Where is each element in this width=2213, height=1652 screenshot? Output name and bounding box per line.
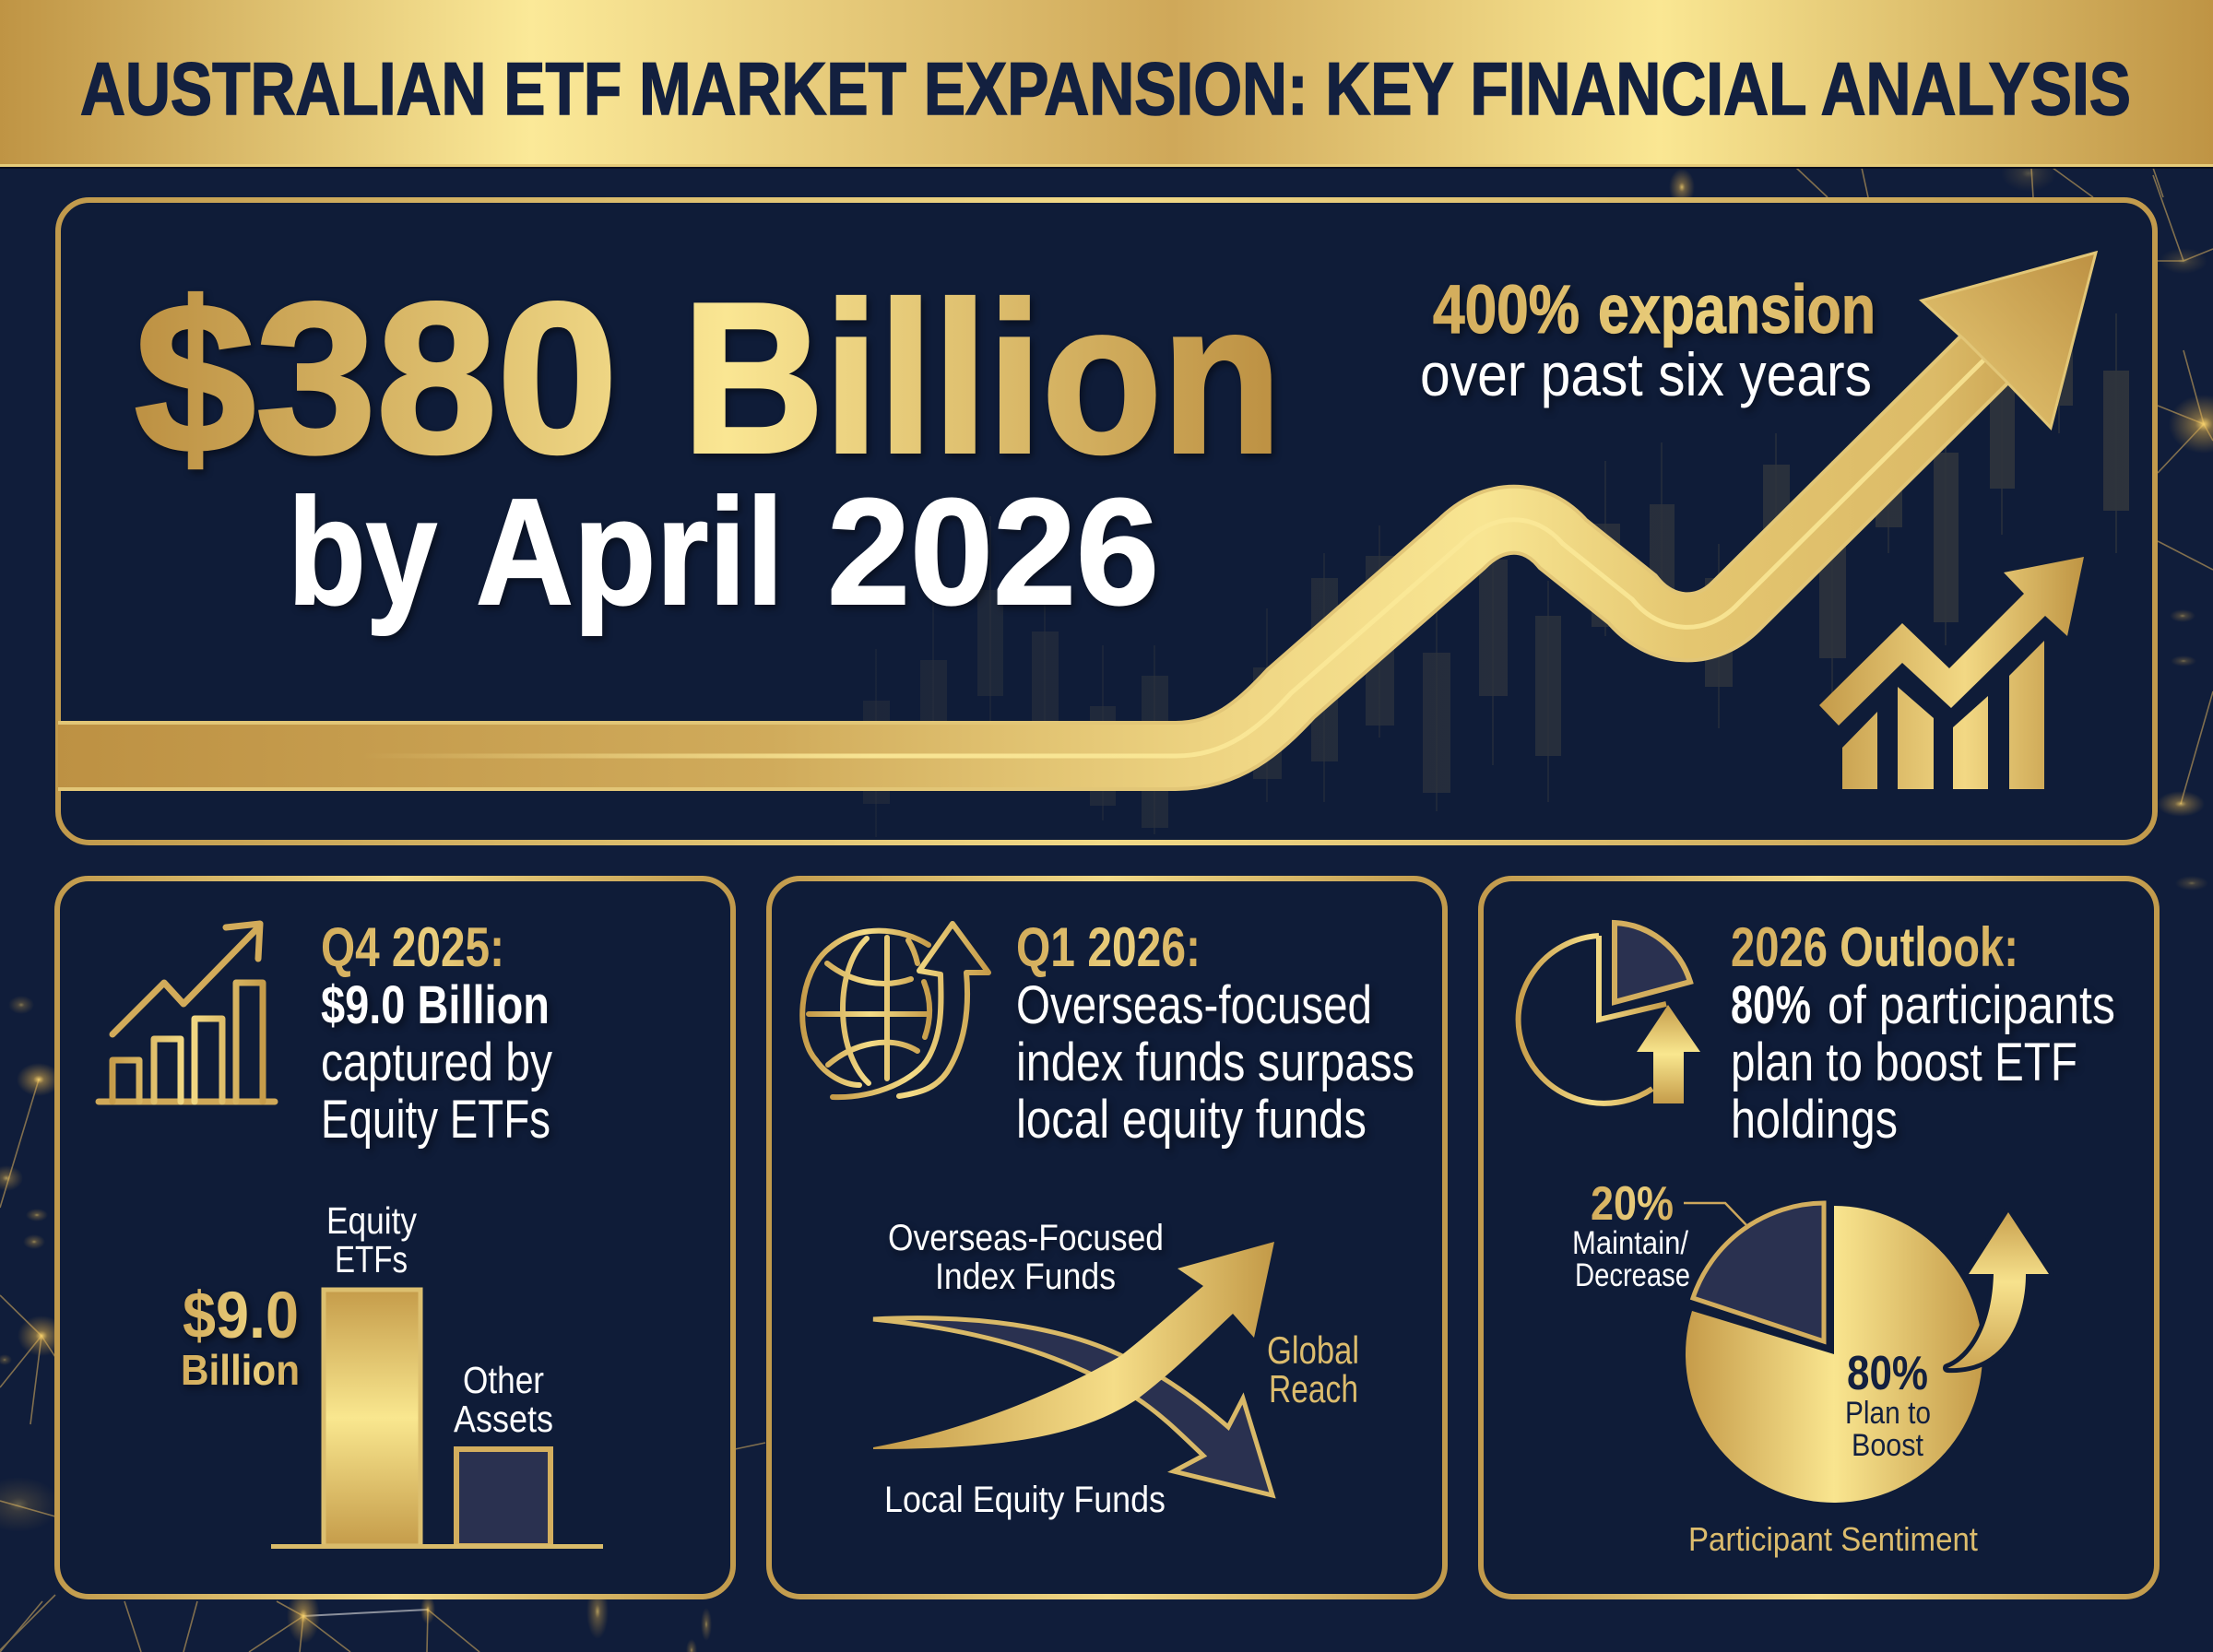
- chart caption: Participant Sentiment: [1688, 1520, 1978, 1558]
- label: 80% plan to boost: Plan to: [1845, 1396, 1931, 1431]
- label: equity ETFs: Equity: [326, 1199, 417, 1242]
- icon: bar chart with arrow: [99, 924, 275, 1102]
- heading and description: of participants: [1828, 975, 2115, 1035]
- label: overseas-focused index funds: [888, 1218, 1164, 1297]
- arrow: overseas funds rising: [873, 1242, 1274, 1449]
- value label: [181, 1280, 300, 1394]
- leader line: [1684, 1203, 1747, 1226]
- icon: bars with rising arrow: [1819, 557, 2084, 789]
- label: 20% maintain or decrease: Maintain/: [1572, 1225, 1688, 1261]
- heading and description: [321, 916, 552, 1150]
- label: overseas-focused index funds: Overseas-Focused: [888, 1218, 1164, 1258]
- expansion callout: over past six years: [1420, 340, 1872, 408]
- label: other assets: Assets: [454, 1398, 553, 1440]
- heading and description: Q4 2025:: [321, 916, 504, 978]
- panel: Q4 2025 equity ETFs: [57, 879, 733, 1597]
- pie slice: 20% maintain or decrease: [1693, 1203, 1824, 1341]
- heading and description: [1016, 916, 1414, 1150]
- label: local equity funds: Local Equity Funds: [884, 1480, 1166, 1520]
- label: other assets: [454, 1359, 553, 1440]
- expansion callout: 400%: [1433, 271, 1580, 348]
- expansion callout: expansion: [1598, 271, 1876, 348]
- headline date: [288, 467, 1159, 636]
- headline date: April: [476, 467, 784, 636]
- icon: pie chart with arrow: [1519, 923, 1700, 1103]
- value label: $9.0: [183, 1280, 299, 1352]
- icon: globe with arrow: [802, 924, 988, 1097]
- heading and description: 80%: [1731, 975, 1811, 1035]
- heading and description: Q1 2026:: [1016, 916, 1201, 978]
- label: overseas-focused index funds: Index Funds: [935, 1257, 1116, 1297]
- expansion callout: [1420, 271, 1876, 408]
- panel: 2026 outlook: [1481, 879, 2157, 1597]
- label: global reach: Global: [1267, 1328, 1359, 1372]
- heading and description: plan to boost ETF: [1731, 1032, 2077, 1092]
- heading and description: local equity funds: [1016, 1090, 1367, 1150]
- pie chart: participant sentiment: [1572, 1177, 2049, 1558]
- title banner: [0, 0, 2213, 169]
- headline date: by: [288, 467, 437, 636]
- headline value: Billion: [682, 259, 1282, 498]
- headline value: [135, 259, 1282, 498]
- heading and description: $9.0 Billion: [321, 975, 550, 1035]
- main growth arrow: [58, 253, 2096, 756]
- heading and description: [1731, 916, 2115, 1150]
- heading and description: 2026 Outlook:: [1731, 916, 2018, 978]
- panel: headline growth: [58, 200, 2155, 843]
- candlestick chart backdrop: [863, 304, 2129, 837]
- headline value: $380: [135, 259, 618, 498]
- heading and description: index funds surpass: [1016, 1032, 1414, 1092]
- label: 80% plan to boost: [1845, 1347, 1931, 1463]
- label: equity ETFs: ETFs: [335, 1238, 408, 1280]
- heading and description: Overseas-focused: [1016, 975, 1372, 1035]
- panel: Q1 2026 overseas funds: [769, 879, 1445, 1597]
- label: equity ETFs: [326, 1199, 417, 1280]
- heading and description: holdings: [1731, 1090, 1898, 1150]
- arrow: local equity funds falling: [873, 1318, 1272, 1495]
- value label: Billion: [181, 1346, 300, 1394]
- label: 80% plan to boost: 80%: [1847, 1347, 1928, 1400]
- bar chart: equity vs other assets: [181, 1199, 603, 1549]
- label: 20% maintain or decrease: Decrease: [1575, 1257, 1690, 1293]
- heading and description: Equity ETFs: [321, 1090, 550, 1150]
- label: global reach: [1267, 1328, 1359, 1410]
- label: global reach: Reach: [1269, 1367, 1358, 1410]
- crossing arrows chart: [873, 1218, 1359, 1520]
- label: other assets: Other: [463, 1359, 544, 1401]
- label: 20% maintain or decrease: 20%: [1591, 1177, 1674, 1231]
- pie slice: 80% plan to boost: [1686, 1206, 1982, 1503]
- chart baseline: [271, 1544, 603, 1549]
- headline date: 2026: [827, 467, 1159, 636]
- label: 20% maintain or decrease: [1572, 1177, 1690, 1293]
- curved arrow up: [1947, 1212, 2049, 1368]
- label: 80% plan to boost: Boost: [1852, 1428, 1923, 1463]
- bar: other assets: [456, 1449, 550, 1546]
- bar: equity ETFs: [324, 1290, 420, 1546]
- heading and description: captured by: [321, 1032, 552, 1092]
